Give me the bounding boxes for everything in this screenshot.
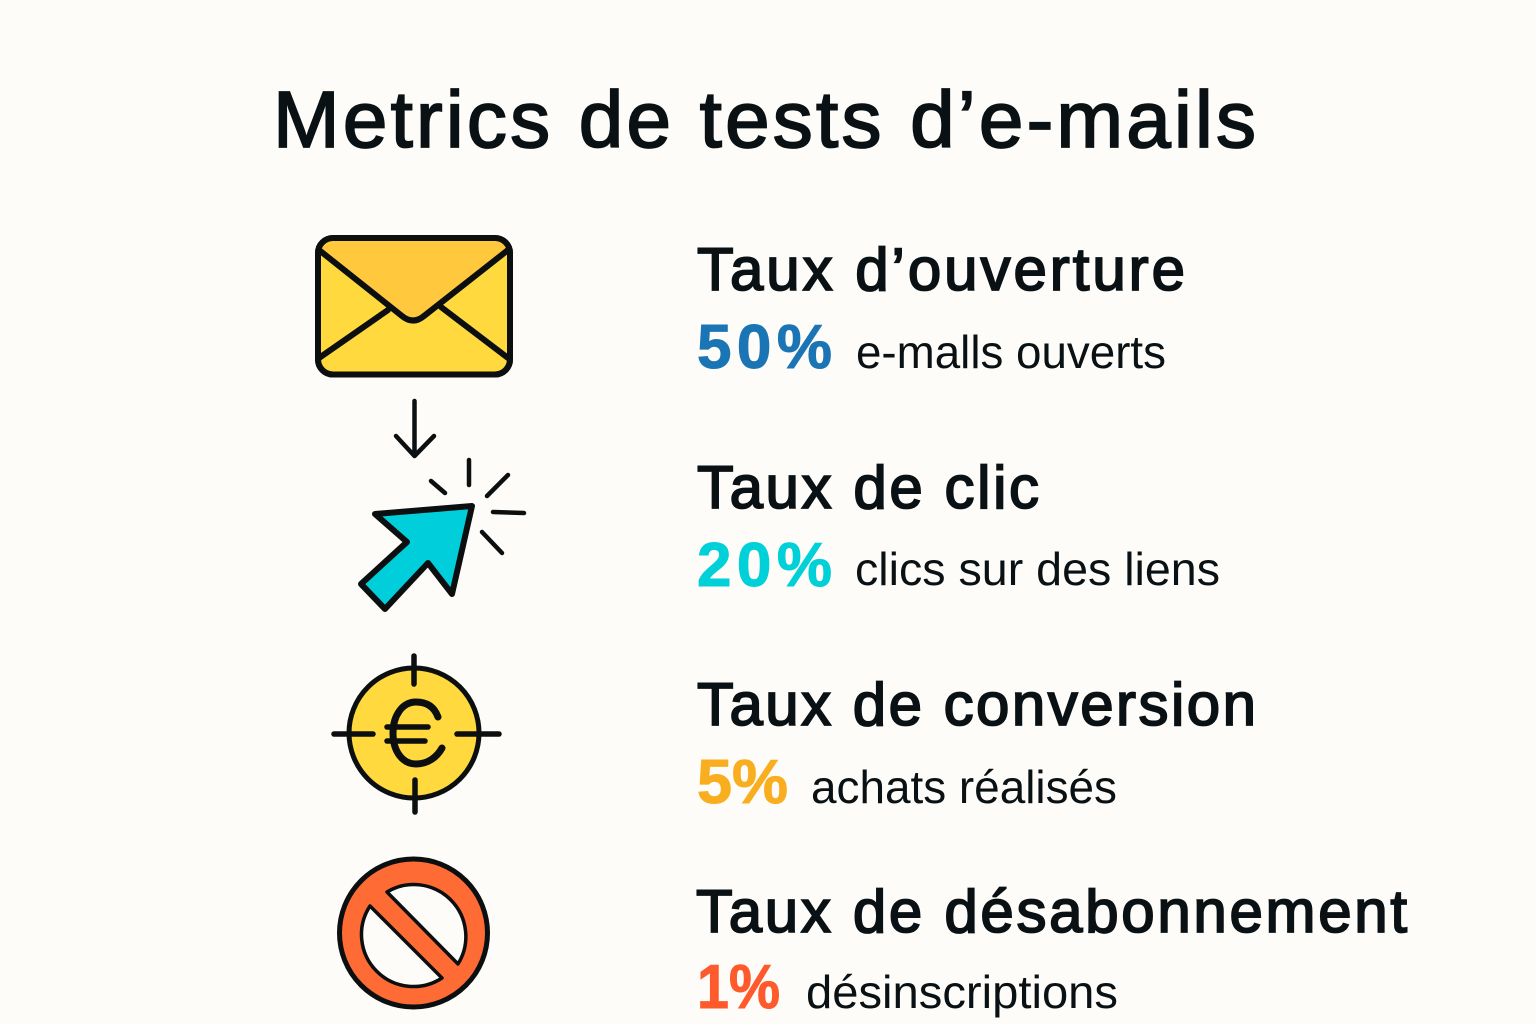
metric: taux d'ouverture: [697, 236, 1185, 382]
description: e-mails ouverts: e-malls ouverts: [856, 326, 1166, 378]
metric: taux de clic: [697, 454, 1220, 600]
description: désinscriptions: désinscriptions: [806, 966, 1118, 1018]
icon: envelope: [318, 238, 510, 374]
icon: euro target: [334, 656, 499, 812]
icon: click cursor: [361, 460, 524, 609]
number: 5%: 5%: [697, 748, 788, 817]
number: 50%: 50%: [697, 313, 832, 382]
heading: taux de clic: Taux de clic: [697, 454, 1039, 521]
heading: taux de conversion: Taux de conversion: [697, 671, 1256, 738]
heading: taux d'ouverture: Taux d’ouverture: [697, 236, 1185, 303]
metric: taux de conversion: [697, 671, 1256, 817]
description: clics sur des liens: clics sur des liens: [855, 543, 1220, 595]
arrow: down: [396, 401, 434, 456]
heading: taux de désabonnement: Taux de désabonnement: [696, 878, 1407, 945]
metric: taux de désabonnement: [696, 878, 1407, 1022]
icon: prohibited sign: [340, 859, 488, 1007]
number: 20%: 20%: [697, 531, 832, 600]
description: achats réalisés: achats réalisés: [811, 761, 1117, 813]
title: Metrics de tests d’e-mails: [273, 75, 1256, 164]
number: 1%: 1%: [697, 953, 780, 1022]
